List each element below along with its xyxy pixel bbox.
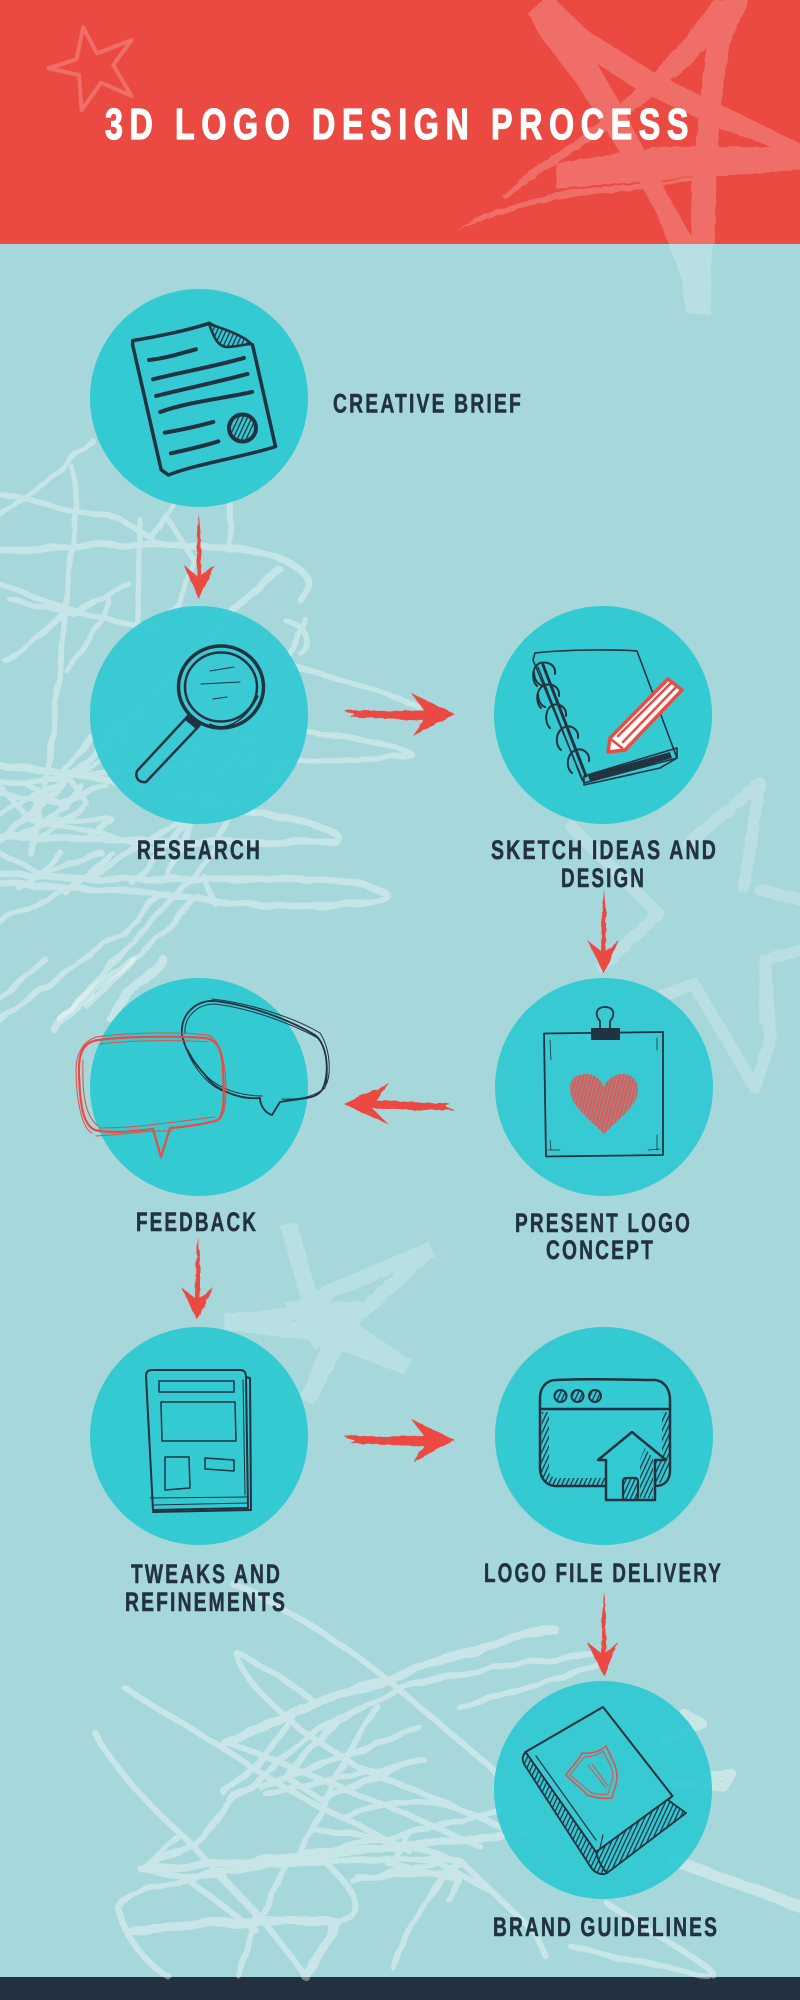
arrow: feedback to tweaks	[181, 1236, 213, 1320]
footer band	[0, 1977, 800, 2000]
label: sketch ideas and design: DESIGN	[561, 863, 646, 893]
label: tweaks and refinements: TWEAKS AND	[131, 1559, 282, 1589]
arrow: sketch to concept	[587, 889, 618, 974]
decorative scribble: bottom	[94, 1583, 800, 1977]
arrow: delivery to guidelines	[587, 1592, 618, 1676]
icon: spiral notebook with pencil	[533, 650, 682, 785]
label: feedback: FEEDBACK	[136, 1207, 258, 1237]
label: sketch ideas and design	[491, 835, 718, 893]
icon: tablet layout sheet	[146, 1370, 251, 1512]
step circle: sketch ideas	[494, 606, 712, 824]
step circle: research	[90, 606, 308, 824]
step circle: logo file delivery	[495, 1327, 713, 1545]
label: research: RESEARCH	[137, 835, 262, 865]
icon: browser window with house	[540, 1379, 670, 1500]
step circle: present logo concept	[495, 978, 713, 1196]
step circle: feedback	[90, 978, 308, 1196]
icon: clipped note with heart	[544, 1007, 663, 1156]
label: present logo concept	[515, 1208, 692, 1265]
decorative star: right outline	[571, 783, 800, 1088]
decorative scribble: left upper	[0, 440, 418, 1020]
label: present logo concept: PRESENT LOGO	[515, 1208, 692, 1238]
decorative star: header left outline	[48, 27, 132, 110]
header band	[0, 0, 800, 244]
label: tweaks and refinements: REFINEMENTS	[125, 1587, 287, 1617]
decorative star: centre brush	[224, 1224, 431, 1401]
decorative scribble: left lower tails	[0, 960, 163, 1029]
icon: speech bubbles	[76, 999, 329, 1157]
icon: guideline book with shield	[523, 1707, 686, 1874]
decorative star: header right	[457, 0, 800, 315]
label: tweaks and refinements	[125, 1559, 287, 1617]
arrow: tweaks to delivery	[344, 1419, 455, 1462]
icon: magnifying glass	[136, 646, 264, 782]
step circle: tweaks	[90, 1327, 308, 1545]
step circle: brand guidelines	[494, 1681, 712, 1899]
arrow: research to sketch	[344, 693, 455, 736]
label: creative brief: CREATIVE BRIEF	[333, 388, 523, 418]
label: present logo concept: CONCEPT	[546, 1235, 655, 1265]
arrow: brief to research	[184, 515, 215, 599]
icon: document	[133, 323, 276, 475]
label: sketch ideas and design: SKETCH IDEAS AND	[491, 835, 718, 865]
arrow: concept to feedback	[344, 1083, 455, 1125]
step circle: creative brief	[90, 289, 308, 507]
